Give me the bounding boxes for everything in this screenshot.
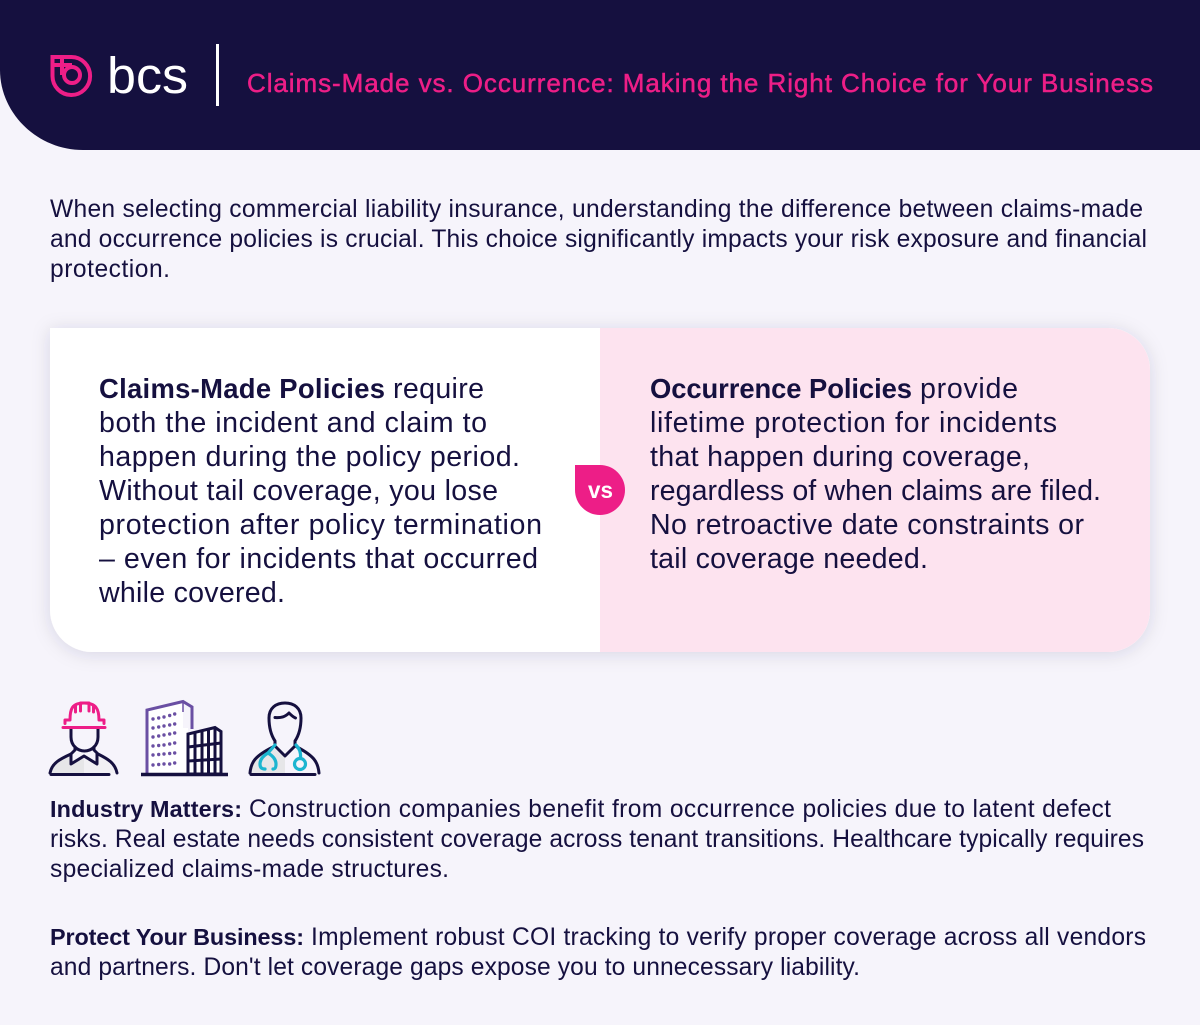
- protect your business text: Protect Your Business:: [50, 924, 304, 950]
- comparison card: [50, 328, 1150, 652]
- panel text: claims-made policies: both the incident and claim to: [99, 407, 487, 439]
- panel text: occurrence policies: provide: [920, 373, 1018, 405]
- panel text: claims-made policies: happen during the policy period.: [99, 441, 520, 473]
- header banner: [0, 0, 1200, 150]
- logo wordmark: bcs: [107, 47, 188, 104]
- intro text: [50, 196, 1147, 283]
- intro text: and occurrence policies is crucial. This choice significantly impacts your risk exposure and financial: [50, 226, 1147, 253]
- panel: occurrence background: [600, 328, 1150, 652]
- panel text: occurrence policies: tail coverage needed.: [650, 543, 928, 575]
- icon: buildings: [141, 702, 228, 774]
- title: Claims-Made vs. Occurrence: Making the Right Choice for Your Business: [247, 68, 1153, 98]
- industry matters text: [50, 796, 1144, 883]
- panel text: occurrence policies: lifetime protection for incidents: [650, 407, 1057, 439]
- divider: [216, 44, 219, 106]
- window dots: [151, 712, 176, 767]
- panel text: claims-made policies: while covered.: [98, 577, 285, 609]
- protect your business text: [50, 924, 1146, 981]
- intro text: When selecting commercial liability insurance, understanding the difference between claims-made: [50, 196, 1143, 223]
- panel text: claims-made policies: Claims-Made Policies: [99, 373, 385, 404]
- vs badge: vs: [588, 477, 613, 503]
- industry matters text: specialized claims-made structures.: [50, 856, 449, 883]
- industry matters text: Construction companies benefit from occurrence policies due to latent defect: [249, 796, 1111, 823]
- intro text: protection.: [50, 256, 170, 283]
- icon: construction worker: [50, 703, 117, 774]
- panel text: claims-made policies: require: [393, 373, 484, 405]
- panel text: claims-made policies: – even for incidents that occurred: [99, 543, 538, 575]
- industry matters text: risks. Real estate needs consistent coverage across tenant transitions. Healthcare typically requires: [50, 826, 1144, 853]
- industry matters text: Industry Matters:: [50, 796, 242, 822]
- panel text: occurrence policies: No retroactive date constraints or: [650, 509, 1084, 541]
- panel text: occurrence policies: Occurrence Policies: [650, 373, 912, 404]
- protect your business text: and partners. Don't let coverage gaps expose you to unnecessary liability.: [50, 954, 860, 981]
- protect your business text: Implement robust COI tracking to verify proper coverage across all vendors: [311, 924, 1146, 951]
- panel text: claims-made policies: protection after policy termination: [99, 509, 542, 541]
- panel text: claims-made policies: Without tail coverage, you lose: [99, 475, 498, 507]
- panel text: occurrence policies: regardless of when claims are filed.: [650, 475, 1101, 507]
- panel text: occurrence policies: that happen during coverage,: [650, 441, 1030, 473]
- icon: bcs logo mark: [52, 57, 90, 95]
- panel text: claims-made policies: [98, 373, 542, 609]
- panel text: occurrence policies: [650, 373, 1101, 575]
- icon: doctor: [250, 703, 319, 774]
- vs badge: [575, 465, 625, 515]
